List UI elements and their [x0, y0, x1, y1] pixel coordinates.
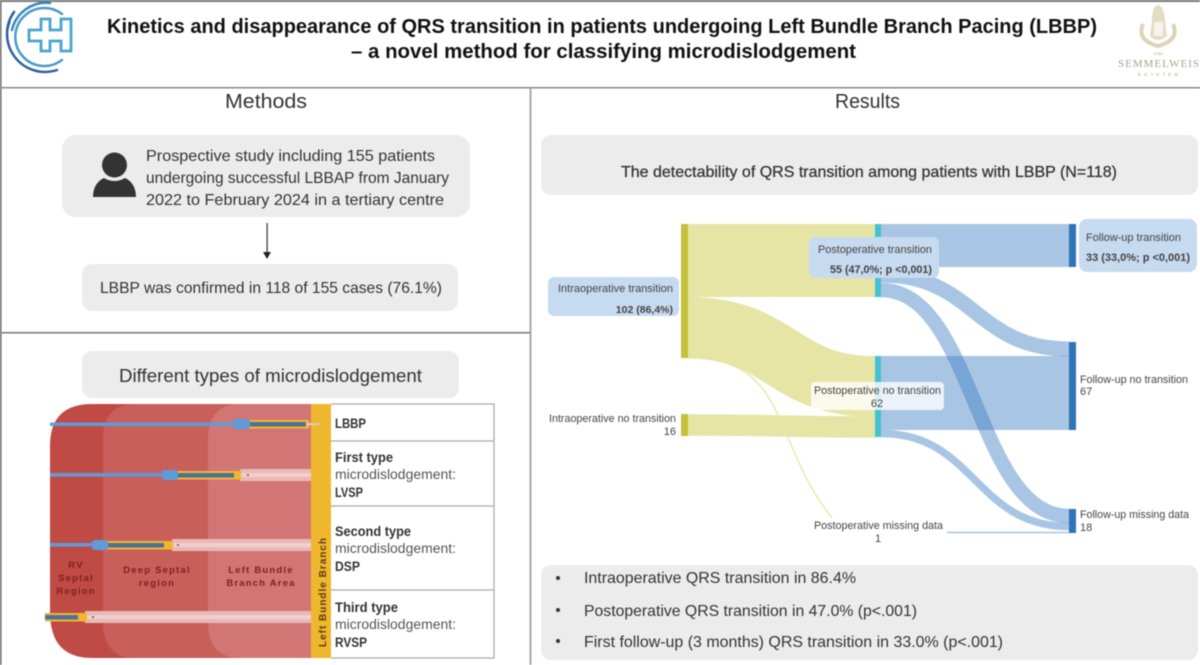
flows: postoperative to follow-up [881, 246, 1069, 532]
title: – a novel method for classifying microdislodgement [351, 41, 856, 63]
row: second type: Second type [335, 524, 411, 539]
nodes [681, 224, 1076, 533]
region labels: Branch Area [226, 578, 296, 589]
label: intraoperative transition: Intraoperative transition [558, 283, 673, 295]
label: follow-up no transition: 67 [1080, 386, 1092, 398]
panel: heading different types of microdislodgement: Different types of microdislodgement [119, 366, 422, 386]
lead: second type DSP [50, 539, 311, 551]
label: postoperative transition: Postoperative transition [818, 244, 932, 256]
panel: results subtitle [541, 135, 1198, 195]
label: postoperative transition [809, 237, 939, 278]
row: third type [335, 600, 456, 650]
finding: intraoperative: Intraoperative QRS transition in 86.4% [584, 570, 856, 587]
label: postoperative no transition: 62 [871, 398, 883, 410]
region labels: RV [68, 560, 84, 571]
panel: LBBP confirmed [82, 264, 458, 311]
row: first type: First type [335, 450, 393, 465]
label: intraoperative transition [548, 277, 679, 316]
label: follow-up no transition: Follow-up no transition [1080, 374, 1188, 386]
label: postoperative missing data [814, 520, 944, 545]
title: Kinetics and disappearance of QRS transition in patients undergoing Left Bundle Branch Pacing (LBBP) [107, 16, 1097, 38]
label: follow-up missing data [1080, 509, 1190, 534]
heading: Methods: Methods [225, 91, 307, 113]
label: intraoperative no transition: 16 [664, 426, 676, 438]
region labels [56, 560, 296, 597]
bar: Left Bundle Branch [311, 404, 331, 658]
study description text: undergoing successful LBBAP from January [146, 170, 449, 187]
finding: first follow-up: First follow-up (3 months) QRS transition in 33.0% (p<.001) [584, 634, 1003, 651]
panel: key findings [541, 565, 1198, 660]
label: postoperative no transition [811, 382, 944, 410]
panel: LBBP confirmed: LBBP was confirmed in 118 of 155 cases (76.1%) [100, 280, 442, 297]
lead: third type RVSP [45, 611, 311, 623]
diagram: septal regions and lead positions [45, 404, 331, 658]
label: follow-up transition [1079, 219, 1197, 272]
label: postoperative no transition: Postoperative no transition [814, 385, 941, 397]
arrow: down [263, 223, 271, 259]
row: third type: RVSP [335, 635, 367, 650]
label: follow-up no transition [1080, 374, 1188, 398]
label: postoperative missing data: Postoperative missing data [814, 520, 944, 532]
study description text [146, 148, 449, 209]
chart: sankey of QRS transition [548, 219, 1197, 545]
row: first type: microdislodgement: [335, 467, 456, 482]
row: second type: microdislodgement: [335, 541, 456, 556]
logo: heart centre [7, 3, 71, 72]
logo: Semmelweis University: 1769 [1154, 51, 1163, 56]
row: third type: microdislodgement: [335, 617, 456, 632]
table: microdislodgement types [331, 404, 494, 658]
region labels: Left Bundle [228, 565, 294, 576]
label: intraoperative no transition [549, 413, 676, 438]
row: first type: LVSP [335, 485, 363, 500]
title [107, 16, 1097, 63]
study description text: Prospective study including 155 patients [146, 148, 435, 165]
finding: postoperative: Postoperative QRS transition in 47.0% (p<.001) [584, 603, 917, 620]
label: follow-up missing data: 18 [1080, 522, 1092, 534]
logo: Semmelweis University [1118, 5, 1199, 77]
label: postoperative missing data: 1 [875, 533, 881, 545]
region labels: Region [56, 586, 96, 597]
panel: study description [62, 135, 470, 217]
logo: Semmelweis University: SEMMELWEIS [1118, 58, 1199, 70]
row: first type [335, 450, 456, 500]
label: intraoperative transition: 102 (86,4%) [616, 304, 673, 316]
region labels: Deep Septal [123, 565, 191, 576]
region labels: Septal [58, 573, 94, 584]
logo: Semmelweis University: EGYETEM [1138, 72, 1178, 77]
study description text: 2022 to February 2024 in a tertiary centre [146, 192, 444, 209]
label: follow-up transition: Follow-up transition [1086, 232, 1181, 244]
panel: results subtitle: The detectability of QRS transition among patients with LBBP (N=118) [621, 164, 1117, 181]
icon: person [93, 152, 136, 197]
row: LBBP: LBBP [335, 416, 366, 431]
label: follow-up transition: 33 (33,0%; p <0,001) [1086, 252, 1190, 264]
panel: heading different types of microdislodgement [82, 351, 459, 398]
row: third type: Third type [335, 600, 398, 615]
label: intraoperative no transition: Intraoperative no transition [549, 413, 676, 425]
heading: Results: Results [835, 91, 900, 113]
lead: LBBP position [50, 419, 319, 429]
row: second type: DSP [335, 559, 360, 574]
region labels: region [139, 578, 175, 589]
row: second type [335, 524, 456, 574]
lead: first type LVSP [50, 469, 311, 481]
label: postoperative transition: 55 (47,0%; p <0,001) [830, 264, 932, 276]
flows: intraoperative to postoperative [688, 260, 875, 518]
bar: Left Bundle Branch: Left Bundle Branch [318, 538, 329, 647]
label: follow-up missing data: Follow-up missing data [1080, 509, 1190, 521]
